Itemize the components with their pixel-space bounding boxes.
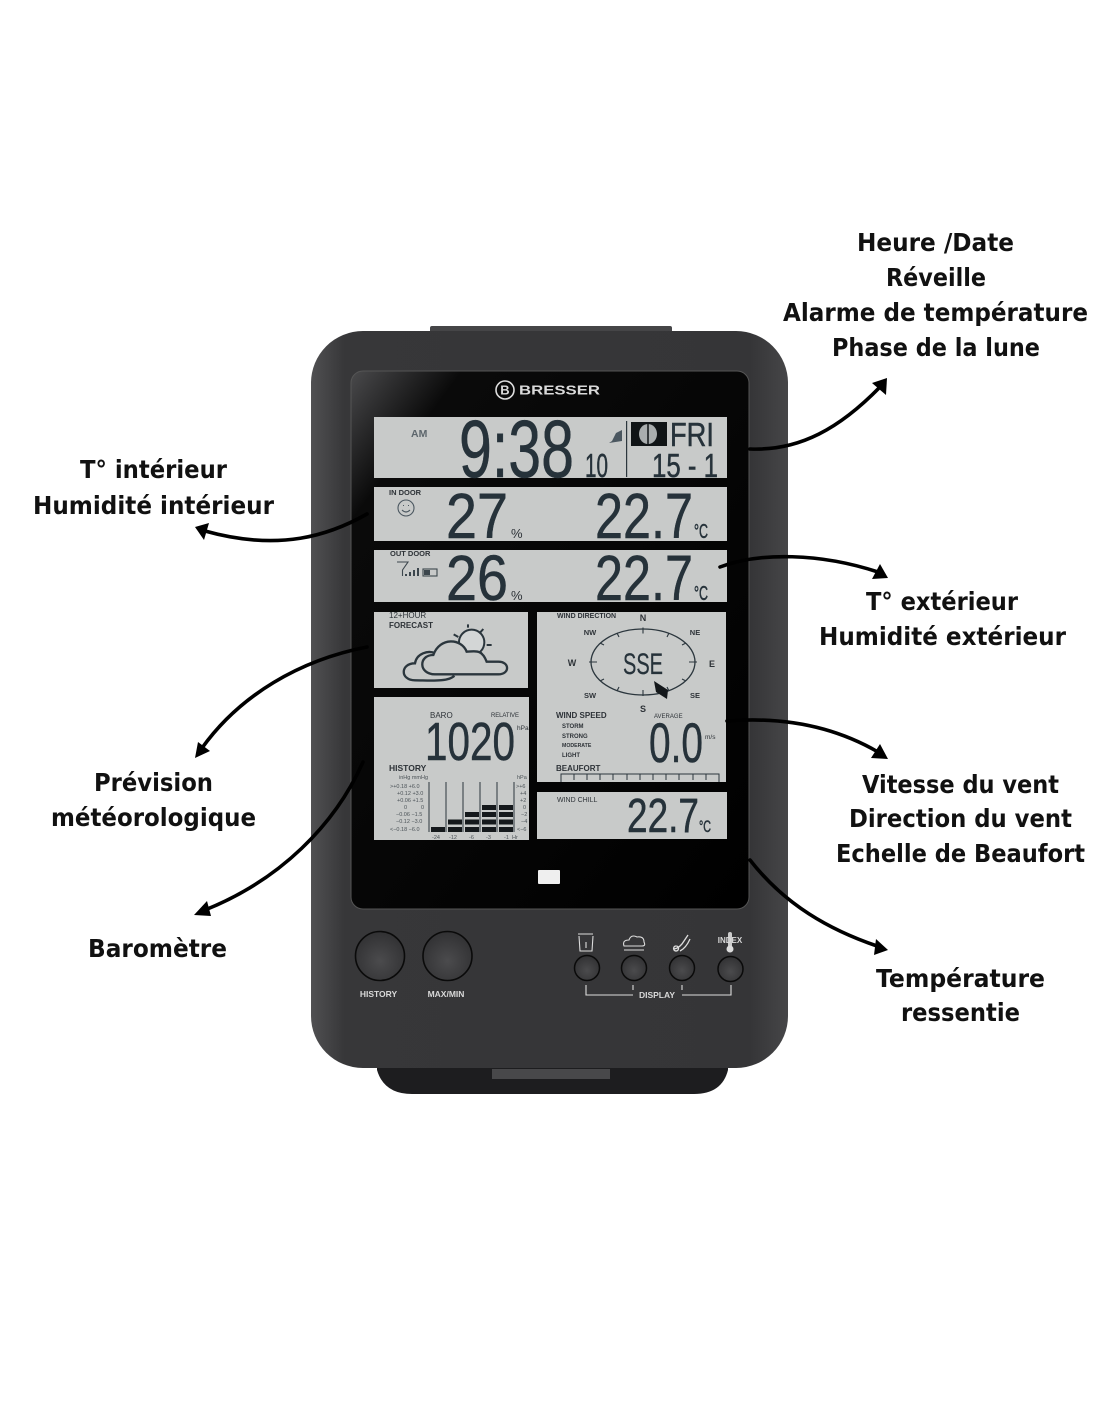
panel: indoor: % — [511, 526, 523, 541]
label: exterieur: T° extérieur — [866, 587, 1019, 616]
panel: wind: STRONG — [562, 734, 588, 740]
alarm icon — [609, 430, 622, 443]
wind pointer — [654, 681, 668, 699]
panel: wind chill: °C — [699, 817, 711, 836]
panel: barometer: 1020 — [425, 712, 515, 772]
panel: time and date: FRI — [670, 416, 714, 453]
panel: wind chill: WIND CHILL — [557, 797, 598, 804]
icon: index thermometer: INDEX — [718, 936, 743, 945]
display glass — [351, 371, 749, 909]
panel: wind chill: 22.7 — [627, 790, 699, 843]
icon: weather — [624, 936, 645, 950]
history bar chart: inHg mmHg — [399, 775, 428, 781]
label: heure date: Réveille — [886, 263, 986, 292]
indicator light — [538, 870, 560, 884]
history bar chart: <−6 — [517, 827, 526, 833]
button: history — [356, 932, 404, 999]
compass: N — [640, 613, 646, 623]
panel: wind: STORM — [562, 724, 584, 730]
panel: time and date: 15 - 1 — [652, 447, 718, 484]
button: max min: MAX/MIN — [428, 989, 464, 999]
panel: wind chill — [537, 790, 727, 843]
history bar chart: −0.12 −3.0 — [396, 819, 422, 825]
history bar chart: -3 — [486, 835, 491, 841]
history bar chart: −2 — [521, 812, 527, 818]
panel: wind — [537, 612, 726, 782]
history bar chart: >+6 — [516, 784, 525, 790]
history bar chart: +0.06 +1.5 — [397, 798, 423, 804]
history bar chart: hPa — [517, 775, 528, 781]
history bar chart: -24 — [432, 835, 440, 841]
panel: outdoor: % — [511, 588, 523, 603]
panel: barometer — [374, 697, 529, 841]
display buttons — [574, 932, 743, 1000]
label: interieur: Humidité intérieur — [33, 491, 275, 520]
panel: wind: LIGHT — [562, 753, 580, 759]
button: max min — [423, 932, 472, 999]
icon: sun and clouds — [404, 624, 507, 681]
panel: indoor: °C — [694, 521, 708, 543]
compass: SE — [690, 691, 700, 700]
panel: outdoor — [374, 542, 727, 614]
label: vent — [836, 770, 1085, 868]
stand — [377, 1060, 728, 1094]
icon: index thermometer — [718, 932, 743, 952]
history bar chart: −0.06 −1.5 — [396, 812, 422, 818]
beaufort scale — [561, 774, 719, 782]
panel: time and date — [374, 404, 727, 495]
panel: outdoor: °C — [694, 583, 708, 605]
panel: indoor: 22.7 — [595, 480, 693, 552]
compass: S — [640, 704, 646, 714]
label: prevision: météorologique — [51, 803, 256, 832]
arrow: barometer to label — [194, 762, 363, 916]
history bar chart: >+0.18 +6.0 — [390, 784, 420, 790]
button: history: HISTORY — [360, 989, 397, 999]
history bar chart: +0.12 +3.0 — [397, 791, 423, 797]
panel: barometer: HISTORY — [389, 763, 427, 773]
label: prevision — [51, 768, 256, 832]
label: exterieur — [819, 587, 1067, 651]
history bar chart: Hr — [512, 835, 518, 841]
panel: barometer: RELATIVE — [491, 713, 519, 719]
label: barometre: Baromètre — [88, 934, 227, 963]
panel: wind: BEAUFORT — [556, 764, 601, 773]
history bar chart: 0 — [404, 805, 407, 811]
history bar chart: 0 — [523, 805, 526, 811]
history bar chart: -1 — [504, 835, 509, 841]
panel: outdoor: OUT DOOR — [390, 549, 431, 558]
moon phase icon — [631, 422, 667, 446]
device body — [311, 331, 788, 1068]
panel: forecast — [374, 611, 528, 688]
panel: outdoor: 26 — [446, 542, 508, 614]
panel: wind: WIND SPEED — [556, 711, 607, 720]
time digits: 9:38 — [459, 404, 574, 495]
panel: wind: 0.0 — [649, 711, 703, 774]
history bar chart — [390, 775, 528, 841]
arrow: wind to label — [727, 720, 888, 759]
stand tab — [492, 1069, 610, 1079]
panel: wind: WIND DIRECTION — [557, 613, 616, 620]
arrow: outdoor to label — [720, 557, 888, 579]
arrow: indoor to label — [195, 514, 367, 541]
brand logo — [496, 381, 600, 399]
history bar chart: <−0.18 −6.0 — [390, 827, 420, 833]
icon: rain gauge — [578, 934, 593, 951]
panel: wind: MODERATE — [562, 743, 592, 749]
weather station device — [311, 326, 788, 1094]
label: exterieur: Humidité extérieur — [819, 622, 1067, 651]
brand logo: B — [500, 382, 510, 398]
display buttons: DISPLAY — [639, 990, 675, 1000]
label: prevision: Prévision — [94, 768, 213, 797]
compass: NE — [690, 628, 700, 637]
panel: indoor: 27 — [446, 480, 508, 552]
history bar chart: -6 — [469, 835, 474, 841]
panel: wind: AVERAGE — [654, 714, 683, 720]
label: temperature ressentie: ressentie — [901, 998, 1020, 1027]
compass: E — [709, 659, 715, 669]
panel: barometer: BARO — [430, 711, 453, 720]
arrow: forecast to label — [195, 647, 367, 758]
panel: forecast: 12+HOUR — [389, 611, 426, 620]
history bar chart: +4 — [520, 791, 526, 797]
history bar chart: −4 — [521, 819, 527, 825]
history bar chart: 0 — [421, 805, 424, 811]
label: heure date — [783, 228, 1088, 362]
brand logo: BRESSER — [519, 384, 600, 398]
arrow: time to label — [750, 378, 887, 449]
panel: forecast: FORECAST — [389, 621, 433, 630]
compass: SW — [584, 691, 597, 700]
panel: time and date: 10 — [585, 447, 608, 484]
smiley icon — [398, 500, 414, 516]
panel: barometer: hPa — [517, 725, 529, 732]
history bar chart: -12 — [449, 835, 457, 841]
label: vent: Vitesse du vent — [862, 770, 1059, 799]
label: temperature ressentie — [876, 964, 1045, 1027]
display bracket — [586, 985, 731, 995]
label: heure date: Phase de la lune — [832, 333, 1040, 362]
signal and battery icons — [397, 562, 437, 576]
compass — [568, 613, 715, 714]
compass: SSE — [623, 648, 663, 681]
label: temperature ressentie: Température — [876, 964, 1045, 993]
panel: indoor: IN DOOR — [389, 488, 422, 497]
label: vent: Direction du vent — [849, 804, 1072, 833]
label: heure date: Heure /Date — [857, 228, 1014, 257]
panel: wind: m/s — [705, 734, 716, 741]
panel: indoor — [374, 480, 727, 552]
arrow: wind chill to label — [750, 860, 888, 955]
compass: NW — [584, 628, 597, 637]
panel: time and date: AM — [411, 428, 428, 440]
compass: W — [568, 658, 577, 668]
history bar chart: +2 — [520, 798, 526, 804]
icon: wind — [674, 935, 690, 951]
label: interieur: T° intérieur — [80, 455, 228, 484]
label: interieur — [33, 455, 275, 520]
panel: outdoor: 22.7 — [595, 542, 693, 614]
